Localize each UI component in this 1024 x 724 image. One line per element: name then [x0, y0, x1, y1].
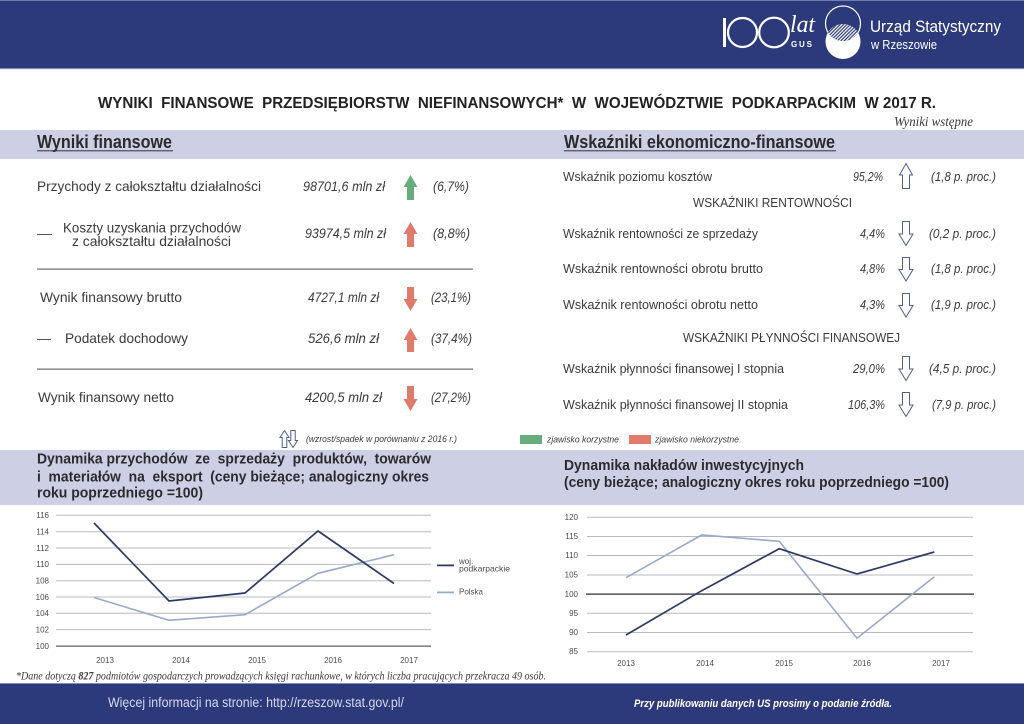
chart legend: Polska [459, 586, 483, 596]
row: płynność II: 106,3% [848, 397, 885, 412]
panel: economic indicators [563, 164, 996, 416]
row: Wynik brutto [40, 287, 471, 311]
heading: export dynamics: roku poprzedniego =100) [37, 485, 203, 502]
logo: 100 lat GUS [723, 12, 816, 49]
y axis labels: 100 [565, 590, 579, 599]
row: Koszty [37, 220, 470, 249]
y axis labels: 115 [565, 532, 579, 541]
row: Podatek [37, 328, 472, 352]
row: rentowność brutto [563, 258, 996, 281]
line chart: export dynamics [36, 511, 510, 665]
row: Koszty: 93974,5 mln zł [305, 226, 387, 241]
row: Wynik brutto: (23,1%) [431, 290, 471, 305]
row: Wynik brutto: Wynik finansowy brutto [40, 289, 182, 305]
y axis labels: 108 [36, 576, 50, 586]
x axis labels [617, 659, 950, 668]
footer link: Więcej informacji na stronie: http://rzeszow.stat.gov.pl/ [108, 695, 404, 710]
y axis labels: 85 [569, 647, 579, 656]
header band [0, 0, 1024, 69]
preliminary note: Wyniki wstępne [894, 115, 973, 130]
office name: w Rzeszowie [870, 37, 937, 52]
footer source note: Przy publikowaniu danych US prosimy o podanie źródła. [634, 698, 892, 710]
row: Koszty: Koszty uzyskania przychodów [63, 220, 242, 236]
footnote: *Dane dotyczą 827 podmiotów gospodarczych prowadzących księgi rachunkowe, w których liczba pracujących przekracza 49 osób. [16, 670, 546, 682]
legend row [280, 430, 739, 448]
subheading: płynność: WSKAŹNIKI PŁYNNOŚCI FINANSOWEJ [683, 330, 900, 345]
heading: investment dynamics: Dynamika nakładów inwestycyjnych [564, 457, 804, 474]
x axis labels [96, 656, 418, 665]
office name: Urząd Statystyczny [870, 17, 1001, 36]
row: poziom kosztów: Wskaźnik poziomu kosztów [563, 170, 713, 184]
row: Wynik netto: Wynik finansowy netto [38, 389, 174, 405]
legend: favourable: zjawisko korzystne [546, 434, 619, 446]
title: WYNIKI FINANSOWE PRZEDSIĘBIORSTW NIEFINANSOWYCH* W WOJEWÓDZTWIE PODKARPACKIM W 2017 R. [98, 93, 936, 112]
y axis labels: 110 [36, 560, 50, 569]
row: Podatek: Podatek dochodowy [65, 330, 188, 346]
y axis labels: 90 [569, 628, 579, 637]
row: Koszty: (8,8%) [433, 226, 470, 241]
x axis labels: 2014 [696, 659, 714, 668]
row: poziom kosztów: (1,8 p. proc.) [931, 170, 996, 184]
heading: export dynamics [37, 450, 431, 502]
x axis labels: 2016 [853, 659, 871, 668]
heading: Wyniki finansowe: Wyniki finansowe [37, 132, 172, 152]
heading: export dynamics: i materiałów na eksport (ceny bieżące; analogiczny okres [37, 468, 429, 486]
y axis labels: 102 [36, 626, 50, 634]
row: rentowność netto [563, 294, 996, 317]
heading: investment dynamics [564, 457, 949, 491]
line chart: investment dynamics [565, 513, 974, 668]
row: Wynik netto: 4200,5 mln zł [305, 390, 383, 405]
row: Wynik netto [38, 386, 471, 411]
row: rentowność netto: Wskaźnik rentowności obrotu netto [563, 298, 758, 312]
row: płynność II: Wskaźnik płynności finansowej II stopnia [563, 398, 788, 412]
logo: 100 lat GUS: GUS [791, 40, 813, 49]
chart heading band [0, 450, 1024, 505]
row: poziom kosztów [563, 164, 996, 188]
row: Koszty: z całokształtu działalności [72, 233, 231, 249]
y axis labels: 116 [36, 511, 50, 520]
section heading band [0, 130, 1024, 159]
y axis labels [36, 511, 50, 651]
subheading: rentowność: WSKAŹNIKI RENTOWNOŚCI [693, 195, 852, 210]
office name [870, 17, 1001, 52]
row: płynność II [563, 392, 996, 416]
x axis labels: 2016 [324, 656, 342, 665]
row: Przychody: 98701,6 mln zł [303, 179, 386, 194]
chart legend [437, 557, 510, 596]
y axis labels: 105 [565, 570, 579, 580]
x axis labels: 2014 [172, 656, 190, 665]
y axis labels: 120 [565, 513, 579, 522]
row: płynność I: 29,0% [852, 361, 885, 376]
legend: unfavourable: zjawisko niekorzystne [654, 434, 739, 446]
row: rentowność sprzedaży [563, 222, 996, 246]
series: Polska [626, 535, 934, 638]
heading: investment dynamics: (ceny bieżące; analogiczny okres roku poprzedniego =100) [564, 474, 949, 491]
y axis labels: 106 [36, 593, 50, 602]
series: woj. podkarpackie [94, 523, 394, 601]
row: rentowność brutto: Wskaźnik rentowności obrotu brutto [563, 262, 763, 276]
x axis labels: 2015 [248, 656, 266, 665]
icon: up/down arrows [280, 430, 298, 448]
row: płynność II: (7,9 p. proc.) [932, 398, 996, 412]
row: rentowność netto: (1,9 p. proc.) [931, 298, 996, 312]
row: Podatek: 526,6 mln zł [308, 331, 380, 346]
row: poziom kosztów: 95,2% [853, 169, 883, 184]
row: rentowność brutto: 4,8% [860, 261, 885, 276]
x axis labels: 2013 [617, 659, 635, 668]
y axis labels: 104 [36, 609, 50, 618]
row: rentowność sprzedaży: Wskaźnik rentowności ze sprzedaży [563, 227, 759, 241]
footer band [0, 683, 1024, 724]
row: Wynik netto: (27,2%) [431, 390, 471, 405]
row: Przychody: (6,7%) [433, 179, 469, 194]
y axis labels: 114 [36, 528, 50, 536]
row: Przychody: Przychody z całokształtu działalności [37, 178, 261, 194]
row: rentowność sprzedaży: (0,2 p. proc.) [929, 227, 996, 241]
series: woj. podkarpackie [626, 549, 934, 635]
heading: export dynamics: Dynamika przychodów ze sprzedaży produktów, towarów [37, 450, 431, 467]
x axis labels: 2017 [932, 659, 950, 668]
row: płynność I [563, 356, 996, 380]
row: rentowność brutto: (1,8 p. proc.) [931, 262, 996, 276]
panel: financial results [37, 175, 473, 411]
x axis labels: 2015 [775, 659, 793, 668]
chart legend: podkarpackie [459, 564, 510, 574]
heading: Wskaźniki ekonomiczno-finansowe: Wskaźniki ekonomiczno-finansowe [564, 132, 835, 152]
row: płynność I: (4,5 p. proc.) [929, 362, 996, 376]
x axis labels: 2013 [96, 656, 114, 665]
row: płynność I: Wskaźnik płynności finansowej I stopnia [563, 362, 784, 376]
row: rentowność sprzedaży: 4,4% [860, 226, 885, 241]
x axis labels: 2017 [400, 656, 418, 665]
chart legend: woj. [458, 557, 473, 566]
legend: favourable [520, 434, 619, 446]
y axis labels: 110 [565, 551, 579, 560]
row: rentowność netto: 4,3% [860, 297, 885, 312]
row: Przychody [37, 175, 469, 200]
y axis labels: 100 [36, 642, 50, 651]
y axis labels: 112 [36, 544, 50, 553]
series: Polska [94, 555, 394, 620]
logo: circles emblem [824, 5, 862, 59]
logo: 100 lat GUS: lat [790, 12, 816, 38]
row: Podatek: (37,4%) [431, 331, 472, 346]
row: Wynik brutto: 4727,1 mln zł [308, 290, 380, 305]
y axis labels: 95 [569, 609, 579, 618]
legend note: (wzrost/spadek w porównaniu z 2016 r.) [306, 434, 457, 445]
y axis labels [565, 513, 579, 656]
